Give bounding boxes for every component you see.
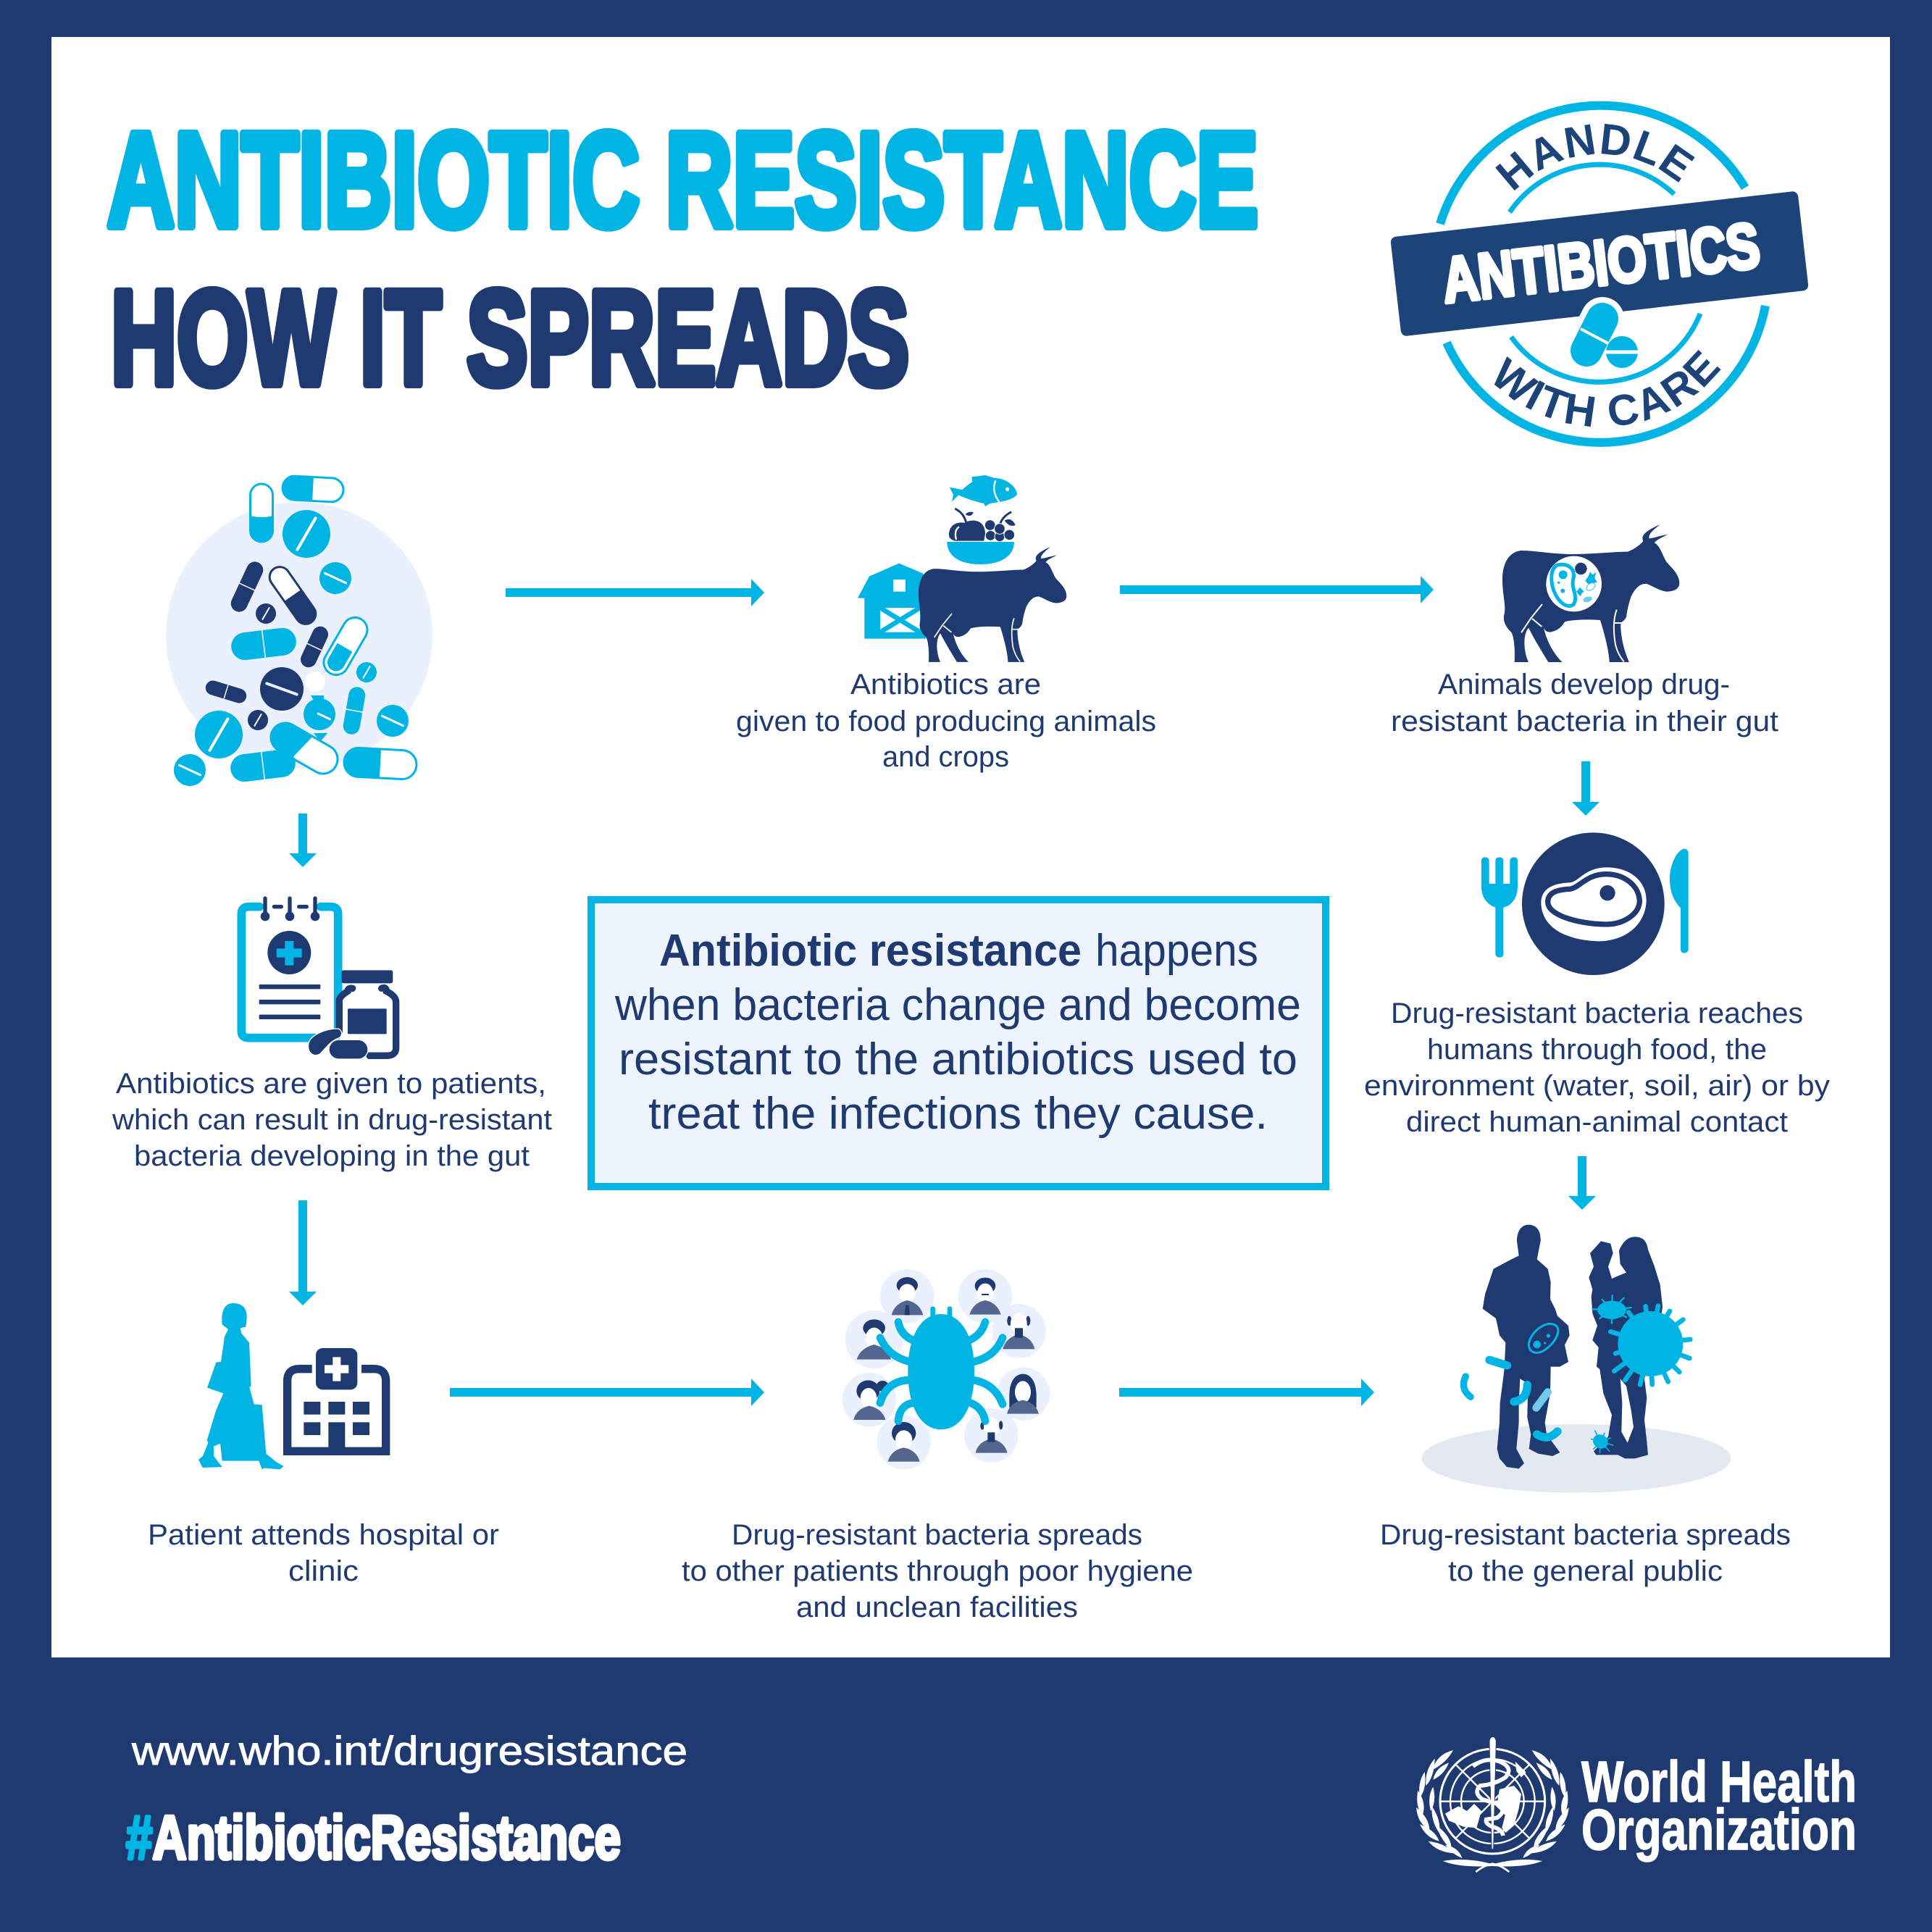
- text: spreads to general public: [1380, 1519, 1791, 1587]
- text: bacteria reaches humans: [1364, 998, 1830, 1138]
- text: bacteria reaches humans: Drug-resistant bacteria reaches: [1391, 998, 1803, 1029]
- WHO wordmark: Organization: [1581, 1797, 1857, 1862]
- callout: definition of antibiotic resistance: when bacteria change and become: [614, 980, 1301, 1030]
- icon: barn, food and cow: [858, 475, 1066, 662]
- callout: definition of antibiotic resistance: happens: [1095, 926, 1258, 976]
- arrow: food animals to gut bacteria: [1120, 576, 1434, 603]
- WHO wordmark: World Health: [1581, 1749, 1857, 1814]
- footer website: www.who.int/drugresistance: [131, 1728, 687, 1773]
- arrow: hospital to other patients: [450, 1379, 764, 1406]
- text: patient attends hospital: clinic: [288, 1555, 359, 1587]
- arrow: food down to public: [1568, 1156, 1596, 1210]
- text: animals given antibiotics: given to food producing animals: [736, 706, 1156, 737]
- text: spreads to general public: Drug-resistant bacteria spreads: [1380, 1519, 1791, 1551]
- text: animals given antibiotics: Antibiotics are: [850, 669, 1041, 701]
- text: bacteria reaches humans: direct human-animal contact: [1406, 1106, 1788, 1138]
- text: spreads to other patients: [682, 1519, 1193, 1623]
- text: antibiotics given to patients: bacteria developing in the gut: [134, 1140, 530, 1172]
- text: spreads to other patients: Drug-resistant bacteria spreads: [732, 1519, 1142, 1551]
- icon: woman walking and hospital: [198, 1303, 386, 1469]
- white content panel: [51, 37, 1890, 1657]
- arrow: other patients to public: [1119, 1379, 1374, 1406]
- text: animals develop bacteria: Animals develop drug-: [1438, 669, 1730, 701]
- badge: handle antibiotics with care: [1391, 101, 1808, 447]
- icon: steak on plate with cutlery: [1481, 832, 1689, 975]
- icon: family with bacteria: [1422, 1225, 1731, 1493]
- text: bacteria reaches humans: humans through food, the: [1427, 1034, 1767, 1066]
- title: [107, 106, 1258, 413]
- callout: definition of antibiotic resistance: [591, 900, 1326, 1187]
- text: patient attends hospital: [148, 1519, 499, 1587]
- callout: definition of antibiotic resistance: resistant to the antibiotics used to: [619, 1034, 1297, 1084]
- callout: definition of antibiotic resistance: Antibiotic resistance: [659, 926, 1082, 976]
- arrow: pills to food animals: [506, 579, 764, 606]
- text: antibiotics given to patients: which can result in drug-resistant: [112, 1104, 552, 1136]
- text: animals develop bacteria: [1391, 669, 1778, 737]
- text: animals given antibiotics: [736, 669, 1156, 773]
- text: spreads to other patients: and unclean facilities: [796, 1592, 1078, 1623]
- text: spreads to other patients: to other patients through poor hygiene: [682, 1555, 1193, 1587]
- text: antibiotics given to patients: Antibiotics are given to patients,: [116, 1068, 546, 1100]
- WHO wordmark: [1581, 1749, 1857, 1862]
- footer hashtag: #AntibioticResistance: [126, 1804, 621, 1873]
- text: antibiotics given to patients: [112, 1068, 552, 1172]
- badge: handle antibiotics with care: WITH CARE: [1494, 349, 1721, 427]
- badge: handle antibiotics with care: ANTIBIOTICS: [1439, 209, 1763, 317]
- icon: pile of pills: [166, 475, 432, 791]
- text: animals develop bacteria: resistant bacteria in their gut: [1391, 706, 1778, 737]
- text: spreads to general public: to the general public: [1448, 1555, 1723, 1587]
- text: animals given antibiotics: and crops: [882, 741, 1009, 773]
- icon: bug spreading among patients: [842, 1269, 1050, 1469]
- text: bacteria reaches humans: environment (water, soil, air) or by: [1364, 1070, 1830, 1102]
- arrow: gut bacteria down to food: [1572, 761, 1599, 816]
- text: patient attends hospital: Patient attends hospital or: [148, 1519, 499, 1551]
- icon: clipboard and medicine jar: [241, 898, 396, 1059]
- arrow: pills down to patients: [289, 814, 317, 867]
- arrow: patients down to hospital: [289, 1200, 317, 1305]
- WHO emblem: [1416, 1737, 1569, 1872]
- badge: handle antibiotics with care: HANDLE: [1495, 123, 1695, 191]
- title: HOW IT SPREADS: [111, 264, 909, 413]
- icon: cow with gut bacteria: [1502, 524, 1679, 662]
- title: ANTIBIOTIC RESISTANCE: [107, 106, 1258, 255]
- callout: definition of antibiotic resistance: treat the infections they cause.: [648, 1089, 1268, 1139]
